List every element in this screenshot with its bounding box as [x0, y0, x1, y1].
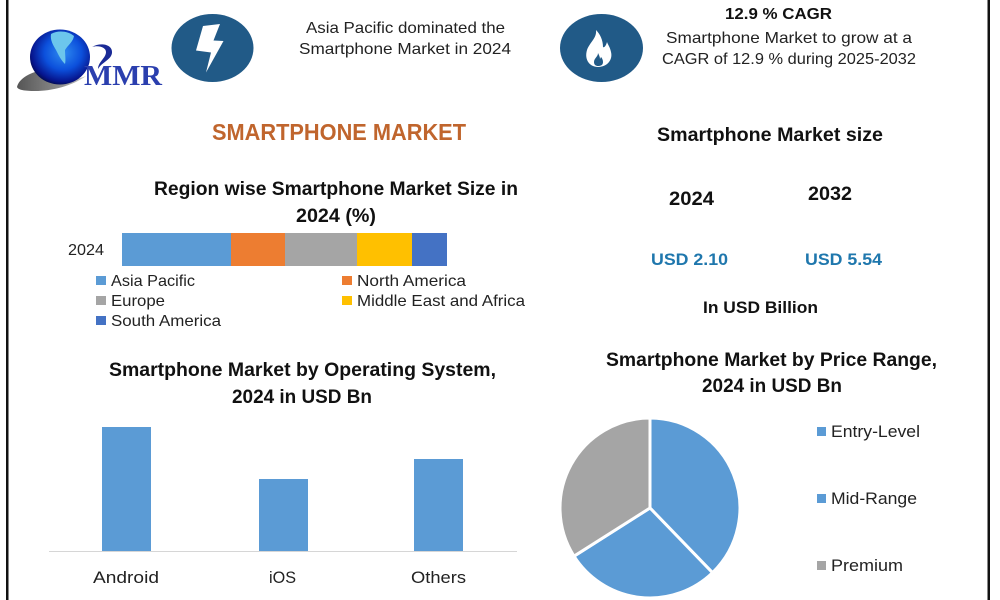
stacked bar chart: [68, 233, 447, 266]
heading: price range: [606, 350, 937, 397]
legend: price range: Premium: [831, 556, 903, 575]
heading: operating system: 2024 in USD Bn: [232, 387, 372, 408]
title: SMARTPHONE MARKET: [212, 119, 466, 145]
panel: market size: [651, 125, 883, 317]
heading: price range: 2024 in USD Bn: [702, 376, 842, 397]
legend: price range: Mid-Range: [831, 489, 917, 508]
legend: regions: [96, 273, 525, 330]
bar chart: Others: [411, 568, 466, 587]
heading: market size: Smartphone Market size: [657, 125, 883, 146]
frame right border: [988, 0, 990, 600]
panel: region share: [68, 179, 525, 330]
text: Asia Pacific callout: [299, 20, 511, 58]
icon: flame: [560, 14, 643, 82]
legend: price range: [817, 422, 920, 575]
text: CAGR callout: 12.9 % CAGR: [725, 6, 832, 23]
legend: regions: South America: [111, 313, 221, 330]
heading: operating system: [109, 360, 496, 408]
panel: price range: [560, 350, 937, 598]
text: Asia Pacific callout: Asia Pacific dominated the: [306, 20, 505, 37]
legend: regions: Asia Pacific: [111, 273, 195, 290]
value 2024: USD 2.10: [651, 250, 728, 269]
icon: lightning bolt: [172, 14, 254, 82]
heading: price range: Smartphone Market by Price Range,: [606, 350, 937, 371]
legend: regions: North America: [357, 273, 466, 290]
year 2024: 2024: [669, 189, 714, 210]
unit note: In USD Billion: [703, 298, 818, 317]
heading: region: [154, 179, 518, 227]
text: CAGR callout: [662, 6, 916, 68]
legend: price range: Entry-Level: [831, 422, 920, 441]
panel: operating system: [49, 360, 517, 587]
logo: MMR: MMR: [84, 61, 163, 92]
year 2032: 2032: [808, 184, 852, 205]
bar chart: iOS: [269, 568, 296, 587]
heading: operating system: Smartphone Market by Operating System,: [109, 360, 496, 381]
text: Asia Pacific callout: Smartphone Market in 2024: [299, 41, 511, 58]
logo: MMR: [17, 30, 163, 92]
pie chart: [560, 418, 740, 598]
heading: region: 2024 (%): [296, 206, 376, 227]
text: CAGR callout: Smartphone Market to grow at a: [666, 30, 912, 47]
bar chart: [49, 427, 517, 587]
frame left border: [6, 0, 8, 600]
legend: regions: Europe: [111, 293, 165, 310]
legend: regions: Middle East and Africa: [357, 293, 525, 310]
stacked bar chart: 2024: [68, 242, 104, 259]
bar chart: Android: [93, 568, 159, 587]
heading: region: Region wise Smartphone Market Size in: [154, 179, 518, 200]
value 2032: USD 5.54: [805, 250, 883, 269]
text: CAGR callout: CAGR of 12.9 % during 2025-2032: [662, 51, 916, 68]
